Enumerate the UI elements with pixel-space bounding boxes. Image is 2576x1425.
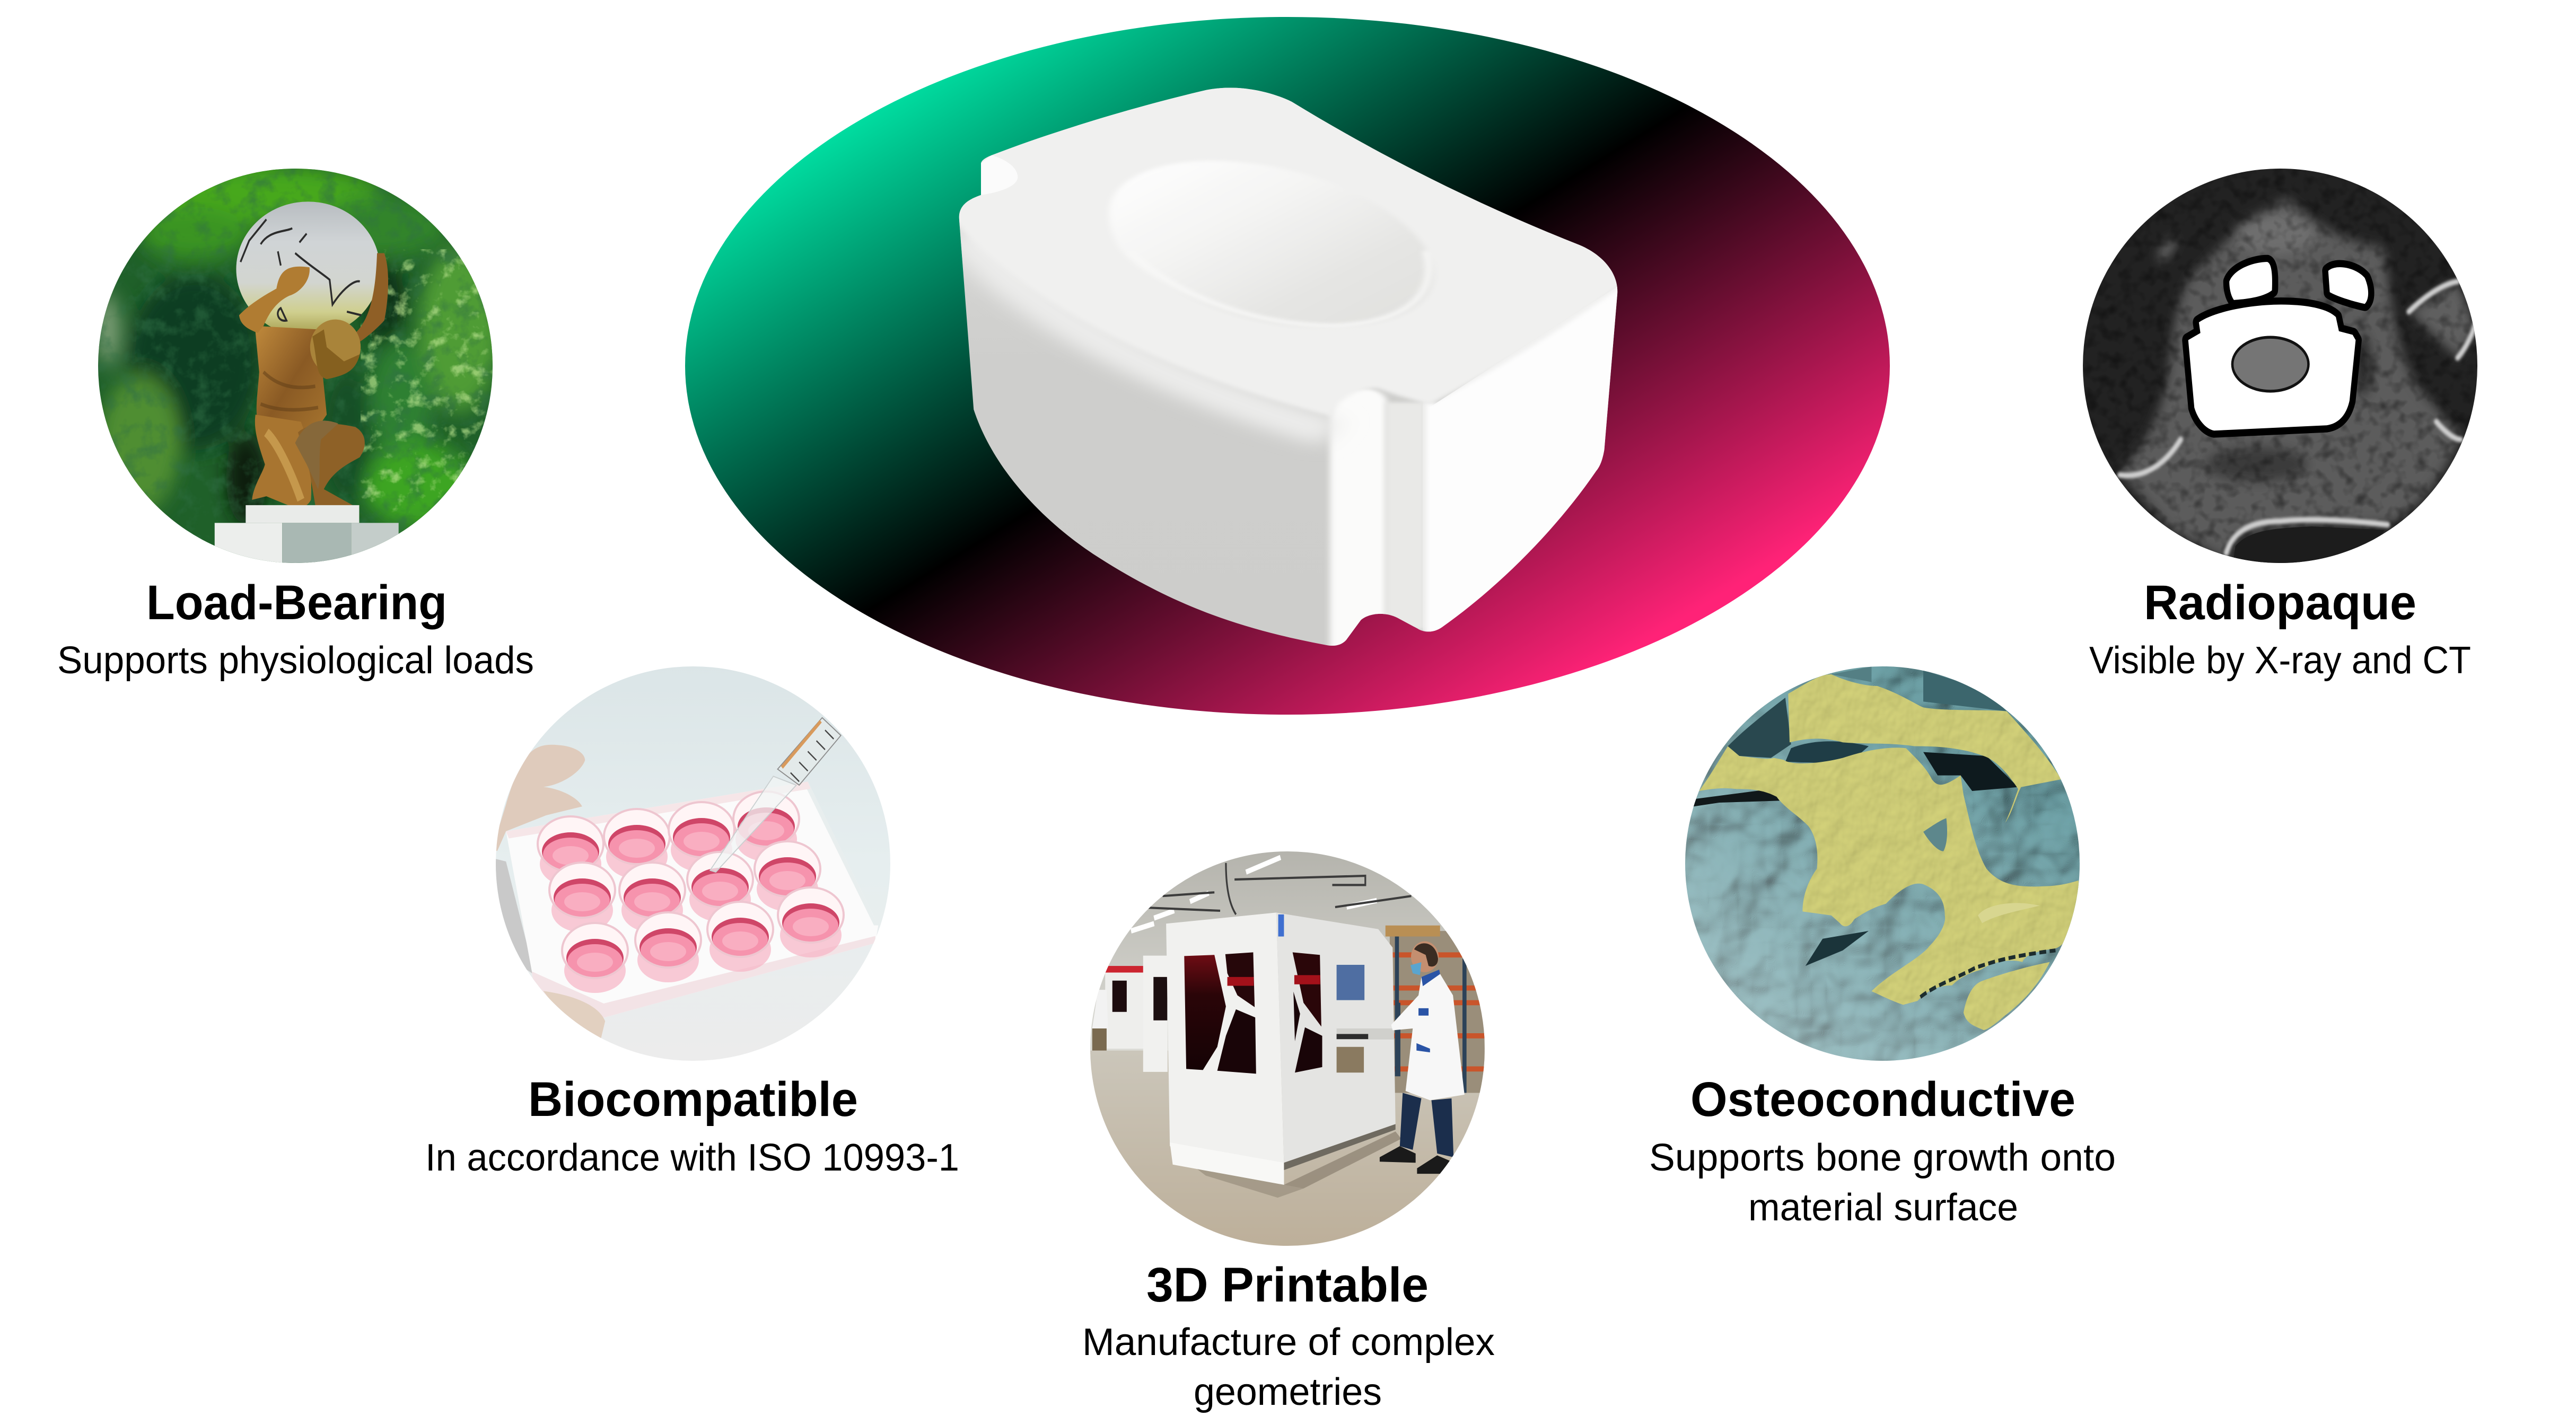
card: Osteoconductive	[1649, 663, 2116, 1229]
heading: Osteoconductive: Osteoconductive	[1690, 1072, 2075, 1127]
text: Osteoconductive description: material surface	[1748, 1186, 2018, 1229]
text: Load-Bearing description: Supports physiological loads	[57, 639, 534, 682]
text: Osteoconductive description	[1649, 1137, 2116, 1229]
text: Osteoconductive description: Supports bone growth onto	[1649, 1137, 2116, 1179]
photo: CT scan slice	[2079, 164, 2482, 567]
heading: Radiopaque: Radiopaque	[2144, 576, 2416, 630]
card: 3D Printable	[1076, 848, 1527, 1413]
heading: 3D Printable: 3D Printable	[1146, 1258, 1429, 1312]
text: 3D Printable description	[1082, 1321, 1495, 1413]
photo: cell culture well plate	[490, 663, 896, 1066]
panel: central gradient ellipse	[685, 17, 1890, 715]
text: 3D Printable description: Manufacture of complex	[1082, 1321, 1495, 1364]
photo: Atlas statue among trees	[95, 164, 499, 567]
card: Radiopaque	[2079, 164, 2482, 682]
text: Biocompatible description: In accordance with ISO 10993-1	[425, 1137, 959, 1179]
photo: 3D printer in factory	[1076, 848, 1527, 1256]
text: Radiopaque description: Visible by X-ray and CT	[2089, 639, 2471, 682]
icon: white ceramic implant	[959, 88, 1617, 646]
card: Biocompatible	[425, 663, 959, 1179]
text: 3D Printable description: geometries	[1194, 1371, 1382, 1413]
card: Load-Bearing	[57, 164, 534, 682]
heading: Biocompatible: Biocompatible	[528, 1072, 858, 1127]
heading: Load-Bearing: Load-Bearing	[146, 576, 447, 630]
photo: SEM of bone cell on surface	[1681, 663, 2084, 1066]
